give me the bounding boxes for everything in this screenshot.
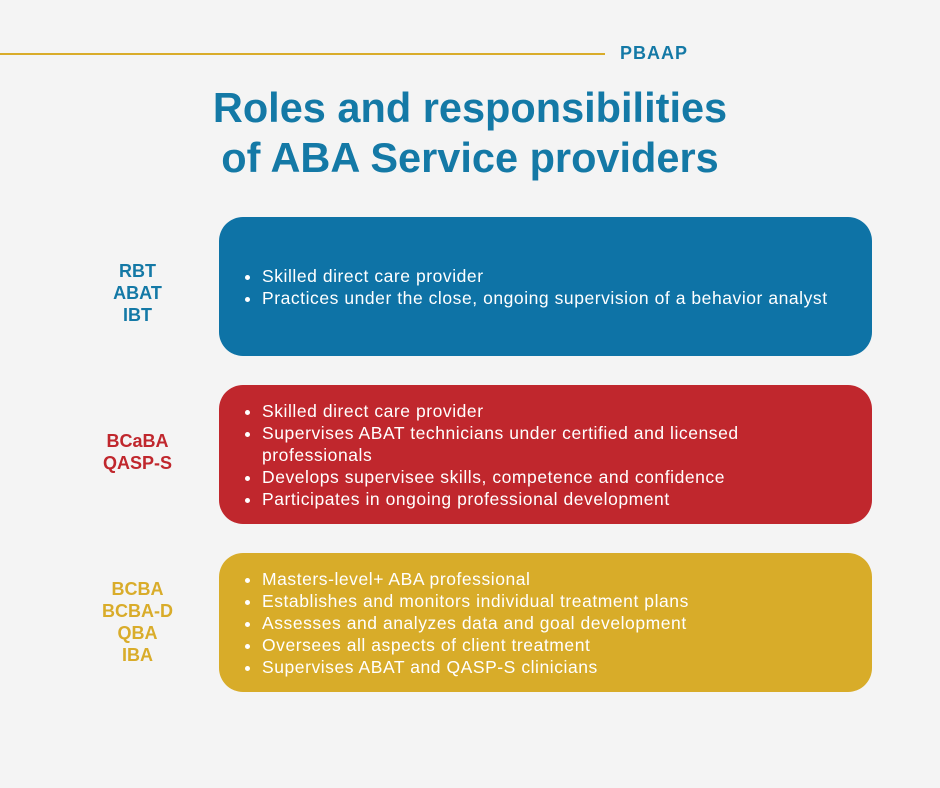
panel: BCaBA: Develops supervisee skills, competence and confidence [262,466,725,486]
panel: BCBA: Assesses and analyzes data and goal development [262,612,687,632]
title [213,84,727,181]
label: RBT group: IBT [123,305,152,325]
label: BCBA group [102,579,173,665]
panel: BCaBA: Supervises ABAT technicians under certified and licensed professionals [262,422,739,464]
label: BCBA group: IBA [122,645,153,665]
panel: RBT: Practices under the close, ongoing supervision of a behavior analyst [262,288,828,308]
panel: BCBA: Supervises ABAT and QASP-S clinicians [262,656,598,676]
panel: BCBA [219,553,872,692]
label: BCaBA group [103,431,172,473]
label: BCaBA group: QASP-S [103,453,172,473]
label: BCBA group: QBA [118,623,158,643]
label: BCBA group: BCBA [112,579,164,599]
label: BCaBA group: BCaBA [106,431,168,451]
panel: RBT: Skilled direct care provider [262,266,484,286]
panel: BCBA: Establishes and monitors individual treatment plans [262,590,689,610]
label: RBT group: ABAT [113,283,162,303]
panel: RBT [219,217,872,356]
title: of ABA Service providers [221,134,719,181]
panel: BCaBA [219,385,872,524]
panel: BCaBA: Skilled direct care provider [262,400,484,420]
header line [0,53,605,55]
panel: BCBA: Masters-level+ ABA professional [262,568,530,588]
label: RBT group [113,261,162,325]
panel: BCBA: Oversees all aspects of client treatment [262,634,590,654]
panel: BCaBA: Participates in ongoing professional development [262,488,670,508]
label: BCBA group: BCBA-D [102,601,173,621]
label: RBT group: RBT [119,261,156,281]
title: Roles and responsibilities [213,84,727,131]
brand: PBAAP: PBAAP [620,43,688,63]
